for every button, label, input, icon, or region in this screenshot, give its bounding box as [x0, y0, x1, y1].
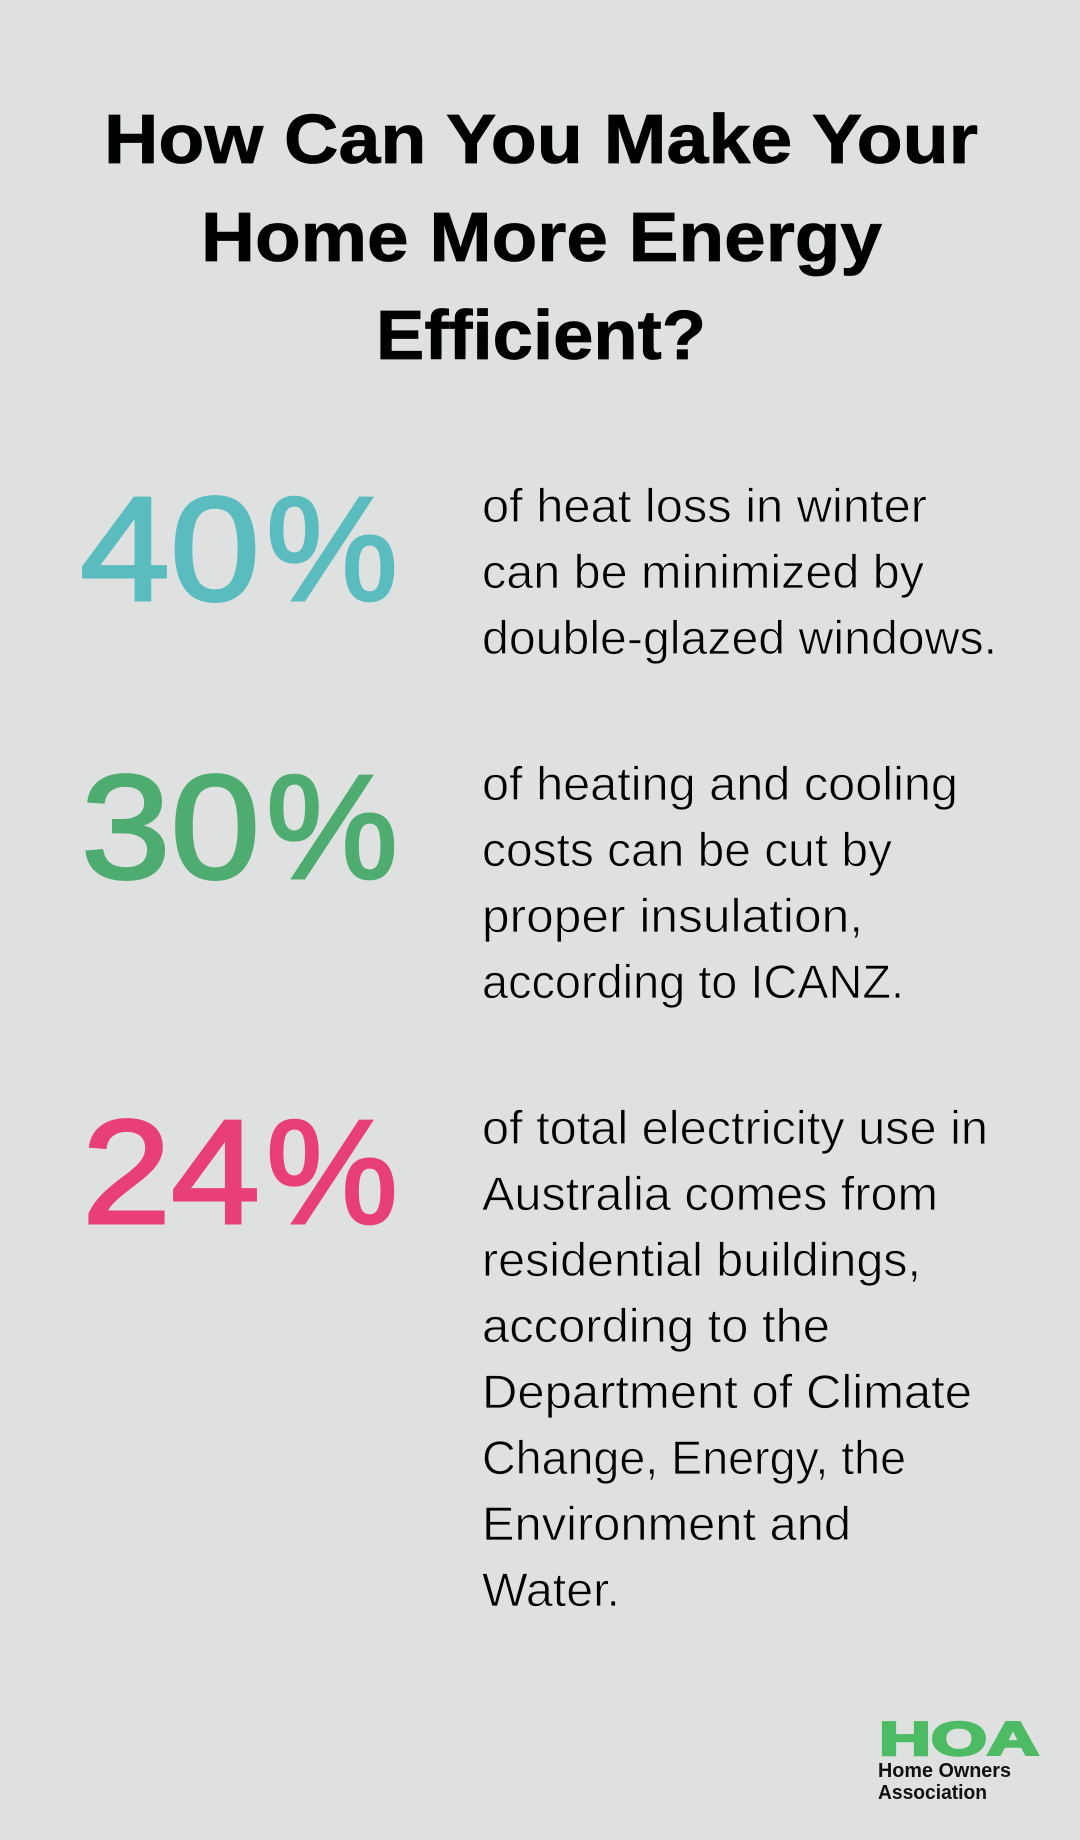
text block: 40% description: double-glazed windows.: [482, 611, 997, 664]
title: How Can You Make Your: [104, 100, 978, 178]
figure: 24%: %: [266, 1090, 398, 1255]
title: Home More Energy: [201, 198, 882, 276]
logo: Home Owners Association: HOA: [879, 1712, 1039, 1765]
text block: 30% description: of heating and cooling: [482, 757, 958, 810]
figure: 24%: [82, 1090, 398, 1255]
text block: 40% description: of heat loss in winter: [482, 479, 927, 532]
figure: 40%: %: [266, 467, 398, 632]
text block: 24% description: Change, Energy, the: [482, 1431, 906, 1484]
figure: 40%: [80, 467, 398, 632]
logo: Home Owners Association: Home Owners: [878, 1760, 1011, 1782]
text block: 30% description: proper insulation,: [482, 889, 863, 942]
text block: 30% description: according to ICANZ.: [482, 955, 904, 1008]
title: [104, 100, 978, 374]
figure: 40%: 40: [80, 467, 260, 632]
text block: 30% description: [482, 757, 958, 1008]
text block: 24% description: Department of Climate: [482, 1365, 972, 1418]
figure: 30%: %: [266, 745, 398, 910]
stat: 24% residential electricity: [82, 1090, 988, 1616]
stat: 30% proper insulation: [81, 745, 958, 1008]
logo: Home Owners Association: Association: [878, 1782, 987, 1804]
text block: 24% description: residential buildings,: [482, 1233, 921, 1286]
text block: 40% description: can be minimized by: [482, 545, 925, 598]
text block: 24% description: Australia comes from: [482, 1167, 938, 1220]
logo: Home Owners Association: [878, 1712, 1039, 1804]
title: Efficient?: [376, 296, 706, 374]
text block: 24% description: Water.: [482, 1563, 620, 1616]
text block: 40% description: [482, 479, 997, 664]
text block: 24% description: Environment and: [482, 1497, 851, 1550]
figure: 30%: [81, 745, 398, 910]
figure: 30%: 30: [81, 745, 260, 910]
stat: 40% double-glazed windows: [80, 467, 997, 664]
text block: 24% description: according to the: [482, 1299, 830, 1352]
text block: 24% description: of total electricity use in: [482, 1101, 988, 1154]
figure: 24%: 24: [82, 1090, 260, 1255]
text block: 24% description: [482, 1101, 988, 1616]
text block: 30% description: costs can be cut by: [482, 823, 893, 876]
